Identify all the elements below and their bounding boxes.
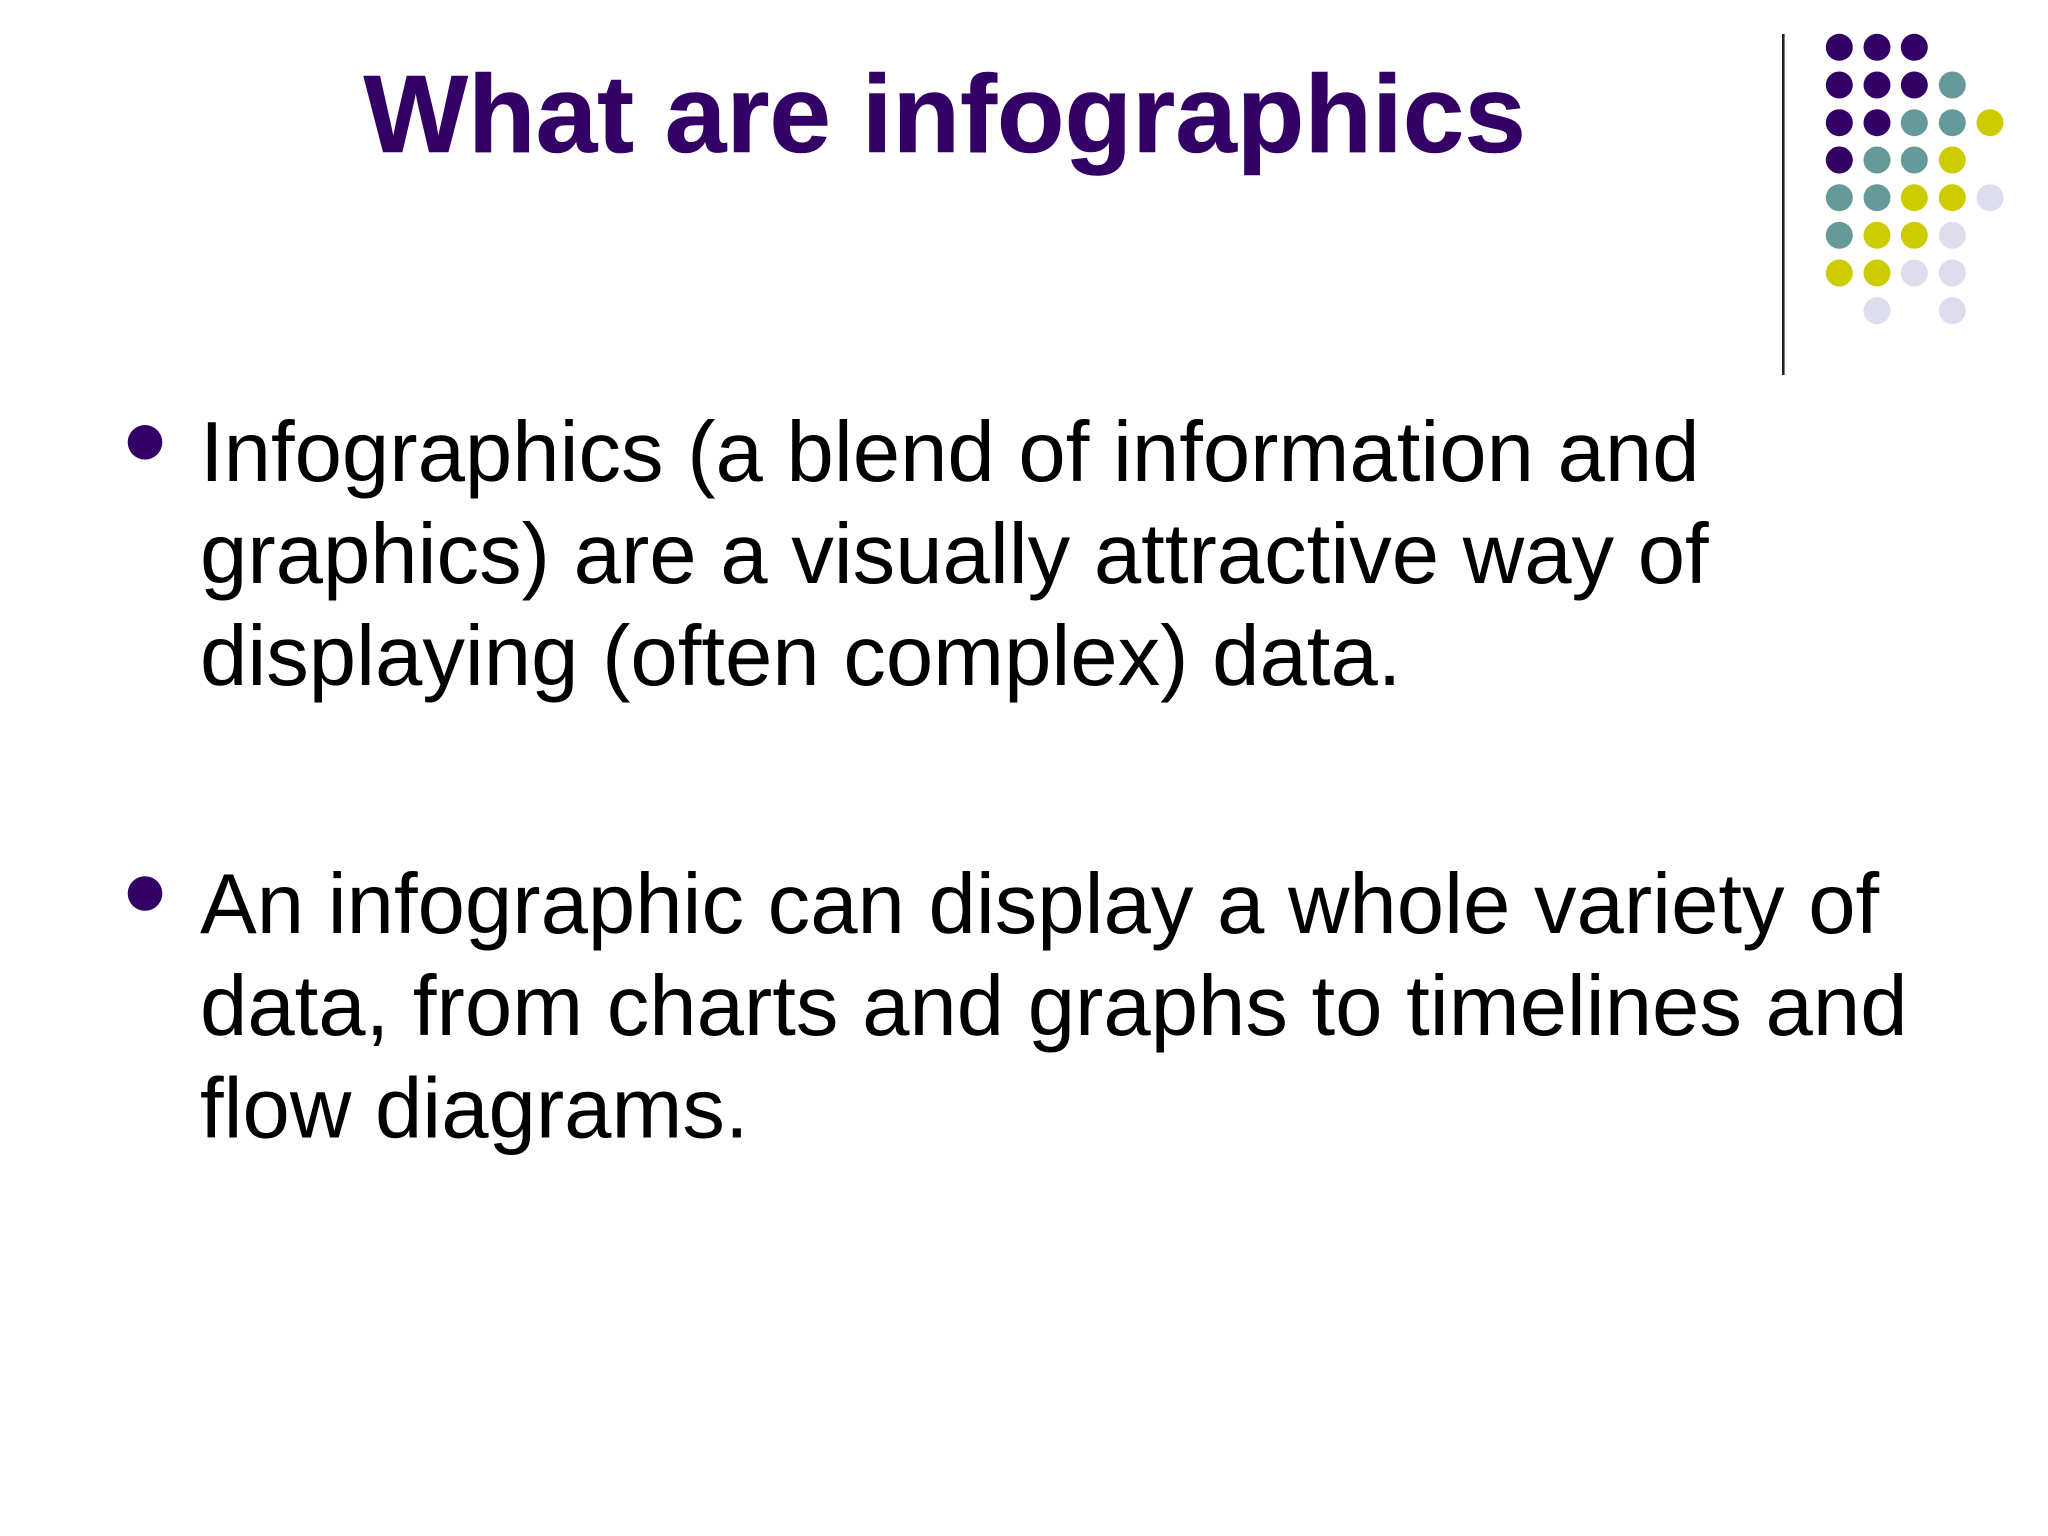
text block: first bullet	[200, 405, 1709, 704]
text block: second bullet	[200, 857, 1908, 1156]
text block: second bullet: data, from charts and graphs to timelines and	[200, 959, 1908, 1054]
bullet marker 2	[128, 876, 162, 911]
vertical divider line	[1782, 34, 1785, 375]
text block: first bullet: displaying (often complex) data.	[200, 609, 1401, 704]
text block: second bullet: flow diagrams.	[200, 1062, 749, 1156]
bullet marker 1	[128, 425, 162, 460]
text block: first bullet: graphics) are a visually attractive way of	[200, 507, 1709, 602]
text block: first bullet: Infographics (a blend of information and	[200, 405, 1700, 500]
title: What are infographics	[364, 53, 1526, 176]
decorative dot grid	[1826, 34, 2004, 324]
text block: second bullet: An infographic can display a whole variety of	[200, 857, 1880, 952]
